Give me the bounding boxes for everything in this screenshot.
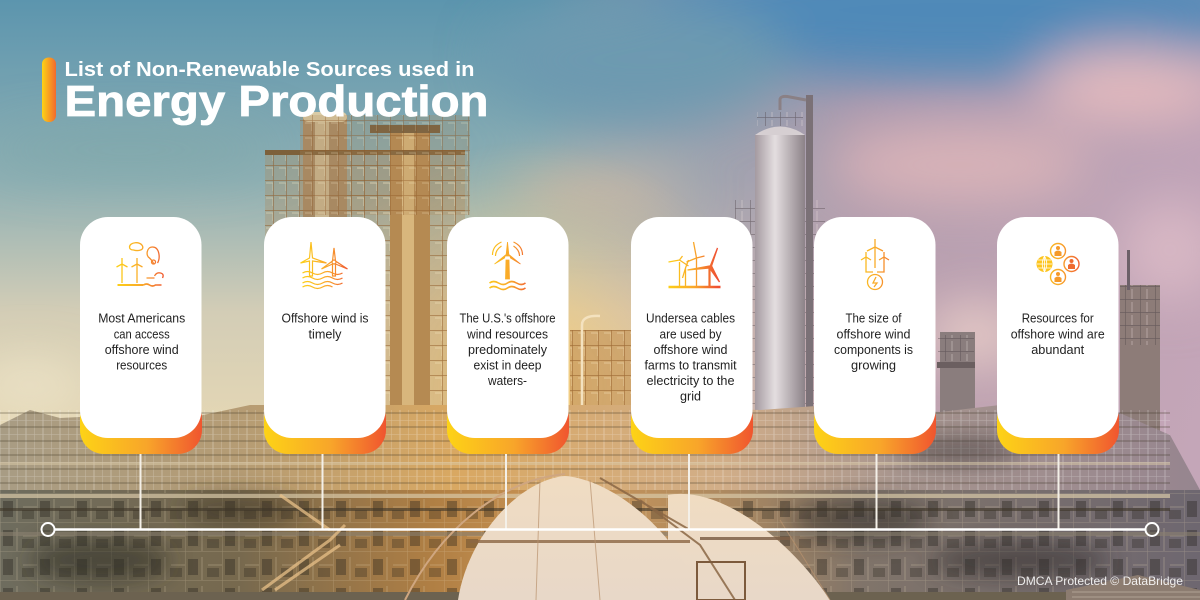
title line 2: Energy Production — [64, 77, 488, 126]
icon: wind farm — [668, 242, 720, 287]
card 6 text: abundant — [1031, 342, 1085, 357]
card 4 text: Undersea cables — [646, 311, 735, 326]
card 4: Undersea cables — [631, 217, 753, 454]
timeline start node — [42, 523, 54, 536]
card 3 text: The U.S.'s offshore — [460, 311, 556, 326]
icon: offshore turbines on waves — [300, 242, 348, 288]
card 1 text: offshore wind — [105, 342, 179, 357]
card 4 text: grid — [680, 389, 701, 404]
icon: turbine with signal arcs — [490, 242, 526, 290]
card 4 text: electricity to the — [646, 373, 734, 388]
card 6 text — [1011, 311, 1105, 357]
card 3 text: predominately — [468, 342, 547, 357]
card 5 text: components is — [834, 342, 913, 357]
icon: globe and people circles — [1036, 244, 1079, 284]
card 1: Most Americans — [80, 217, 202, 454]
icon: three turbines and power circle — [861, 239, 889, 290]
title accent bar — [42, 58, 56, 122]
card 4 text: farms to transmit — [644, 358, 737, 372]
right house — [1066, 575, 1200, 600]
card 6 text: offshore wind are — [1011, 326, 1105, 341]
card 5 text — [834, 311, 913, 372]
card 3 text — [460, 311, 556, 388]
card 5 text: offshore wind — [836, 326, 910, 341]
domes — [668, 494, 830, 600]
card 5 text: The size of — [846, 311, 902, 326]
timeline — [42, 454, 1158, 536]
icon: turbines, cloud and bulb — [116, 243, 163, 286]
card 4 text: are used by — [660, 326, 722, 341]
card 2 text — [282, 311, 369, 341]
card 3: U.S. offshore wind resources — [447, 217, 569, 454]
card 3 text: exist in deep — [474, 358, 542, 372]
card 2: Offshore wind is timely — [264, 217, 386, 454]
stairs — [262, 495, 345, 590]
card 4 text: offshore wind — [654, 342, 728, 357]
card 4 text — [644, 311, 737, 404]
card 6 text: Resources for — [1022, 311, 1094, 326]
right big tower — [735, 200, 825, 450]
title block — [42, 58, 488, 126]
card 1 text: resources — [116, 358, 168, 372]
card 1 text: Most Americans — [98, 311, 186, 326]
card 3 text: wind resources — [466, 326, 548, 341]
card 2 text: timely — [308, 326, 342, 341]
card 5 text: growing — [851, 358, 896, 372]
card 1 text — [98, 311, 186, 372]
right tower — [1120, 285, 1160, 465]
left towers — [265, 150, 465, 450]
mid structure — [570, 330, 640, 440]
small tower — [940, 332, 975, 452]
timeline end node — [1146, 523, 1158, 536]
watermark: DMCA Protected © DataBridge — [1017, 574, 1183, 588]
card 2 text: Offshore wind is — [282, 311, 369, 326]
card 1 text: can access — [114, 326, 170, 341]
title line 1: List of Non-Renewable Sources used in — [64, 59, 474, 81]
card 3 text: waters- — [487, 373, 527, 388]
card 5: size of components — [814, 217, 936, 454]
upper plant band — [0, 400, 1200, 600]
card 6: Resources abundant — [997, 217, 1119, 454]
